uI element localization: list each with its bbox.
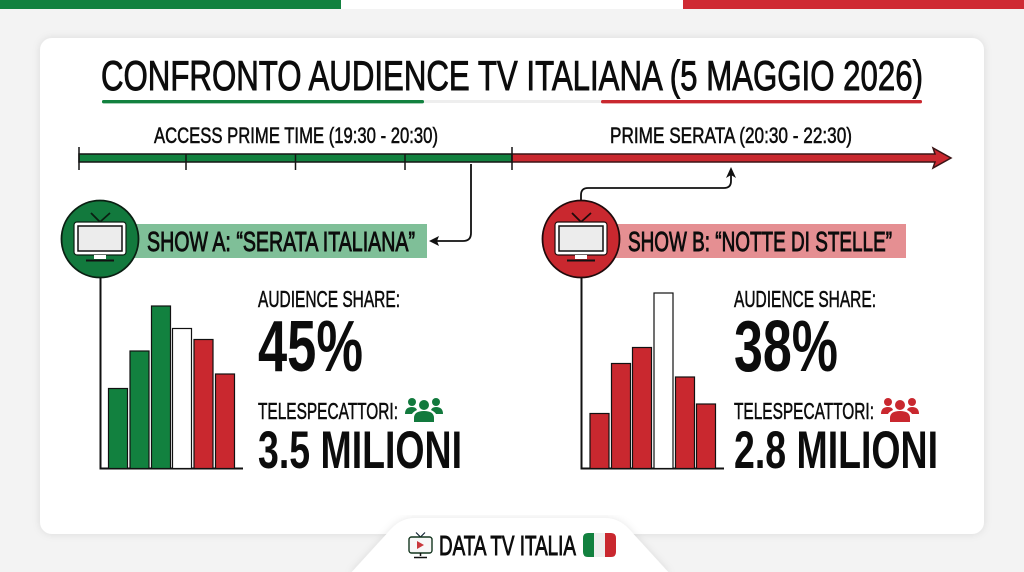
show B audience share value: 38% — [734, 307, 838, 387]
show A heading: SHOW A: “SERATA ITALIANA” — [147, 226, 415, 257]
show B audience share label: AUDIENCE SHARE: — [734, 286, 876, 312]
icon: show B people — [881, 398, 919, 422]
top tricolor band — [0, 0, 1024, 9]
show A audience share label: AUDIENCE SHARE: — [258, 286, 400, 312]
footer tab — [350, 518, 670, 572]
show B viewers label: TELESPECATTORI: — [734, 398, 874, 424]
timeline arrow — [79, 147, 951, 170]
show A audience share value: 45% — [258, 307, 363, 387]
connector arrow: show B to prime serata — [581, 167, 736, 200]
show B viewers value: 2.8 MILIONI — [734, 421, 938, 480]
icon: footer television — [409, 532, 432, 558]
connector arrow: show A to access prime time — [429, 164, 471, 246]
show A viewers value: 3.5 MILIONI — [258, 421, 462, 480]
show A bar chart — [108, 306, 234, 468]
show A label banner — [125, 224, 427, 258]
icon: show A television — [62, 200, 138, 278]
icon: italian flag — [583, 533, 616, 557]
icon: show A people — [405, 398, 443, 422]
footer brand name: DATA TV ITALIA — [439, 530, 576, 561]
show A axes — [100, 270, 243, 468]
show B label banner — [606, 224, 906, 258]
title underline — [102, 100, 922, 103]
show B axes — [582, 270, 724, 468]
label: prime serata: PRIME SERATA (20:30 - 22:30) — [610, 123, 852, 148]
panel: show B — [542, 200, 938, 480]
show A viewers label: TELESPECATTORI: — [258, 398, 398, 424]
show B heading: SHOW B: “NOTTE DI STELLE” — [628, 226, 892, 257]
label: access prime time: ACCESS PRIME TIME (19:30 - 20:30) — [154, 123, 438, 148]
icon: show B television — [542, 200, 620, 278]
panel: show A — [62, 200, 462, 480]
show B bar chart — [590, 293, 716, 468]
main card — [40, 38, 984, 534]
